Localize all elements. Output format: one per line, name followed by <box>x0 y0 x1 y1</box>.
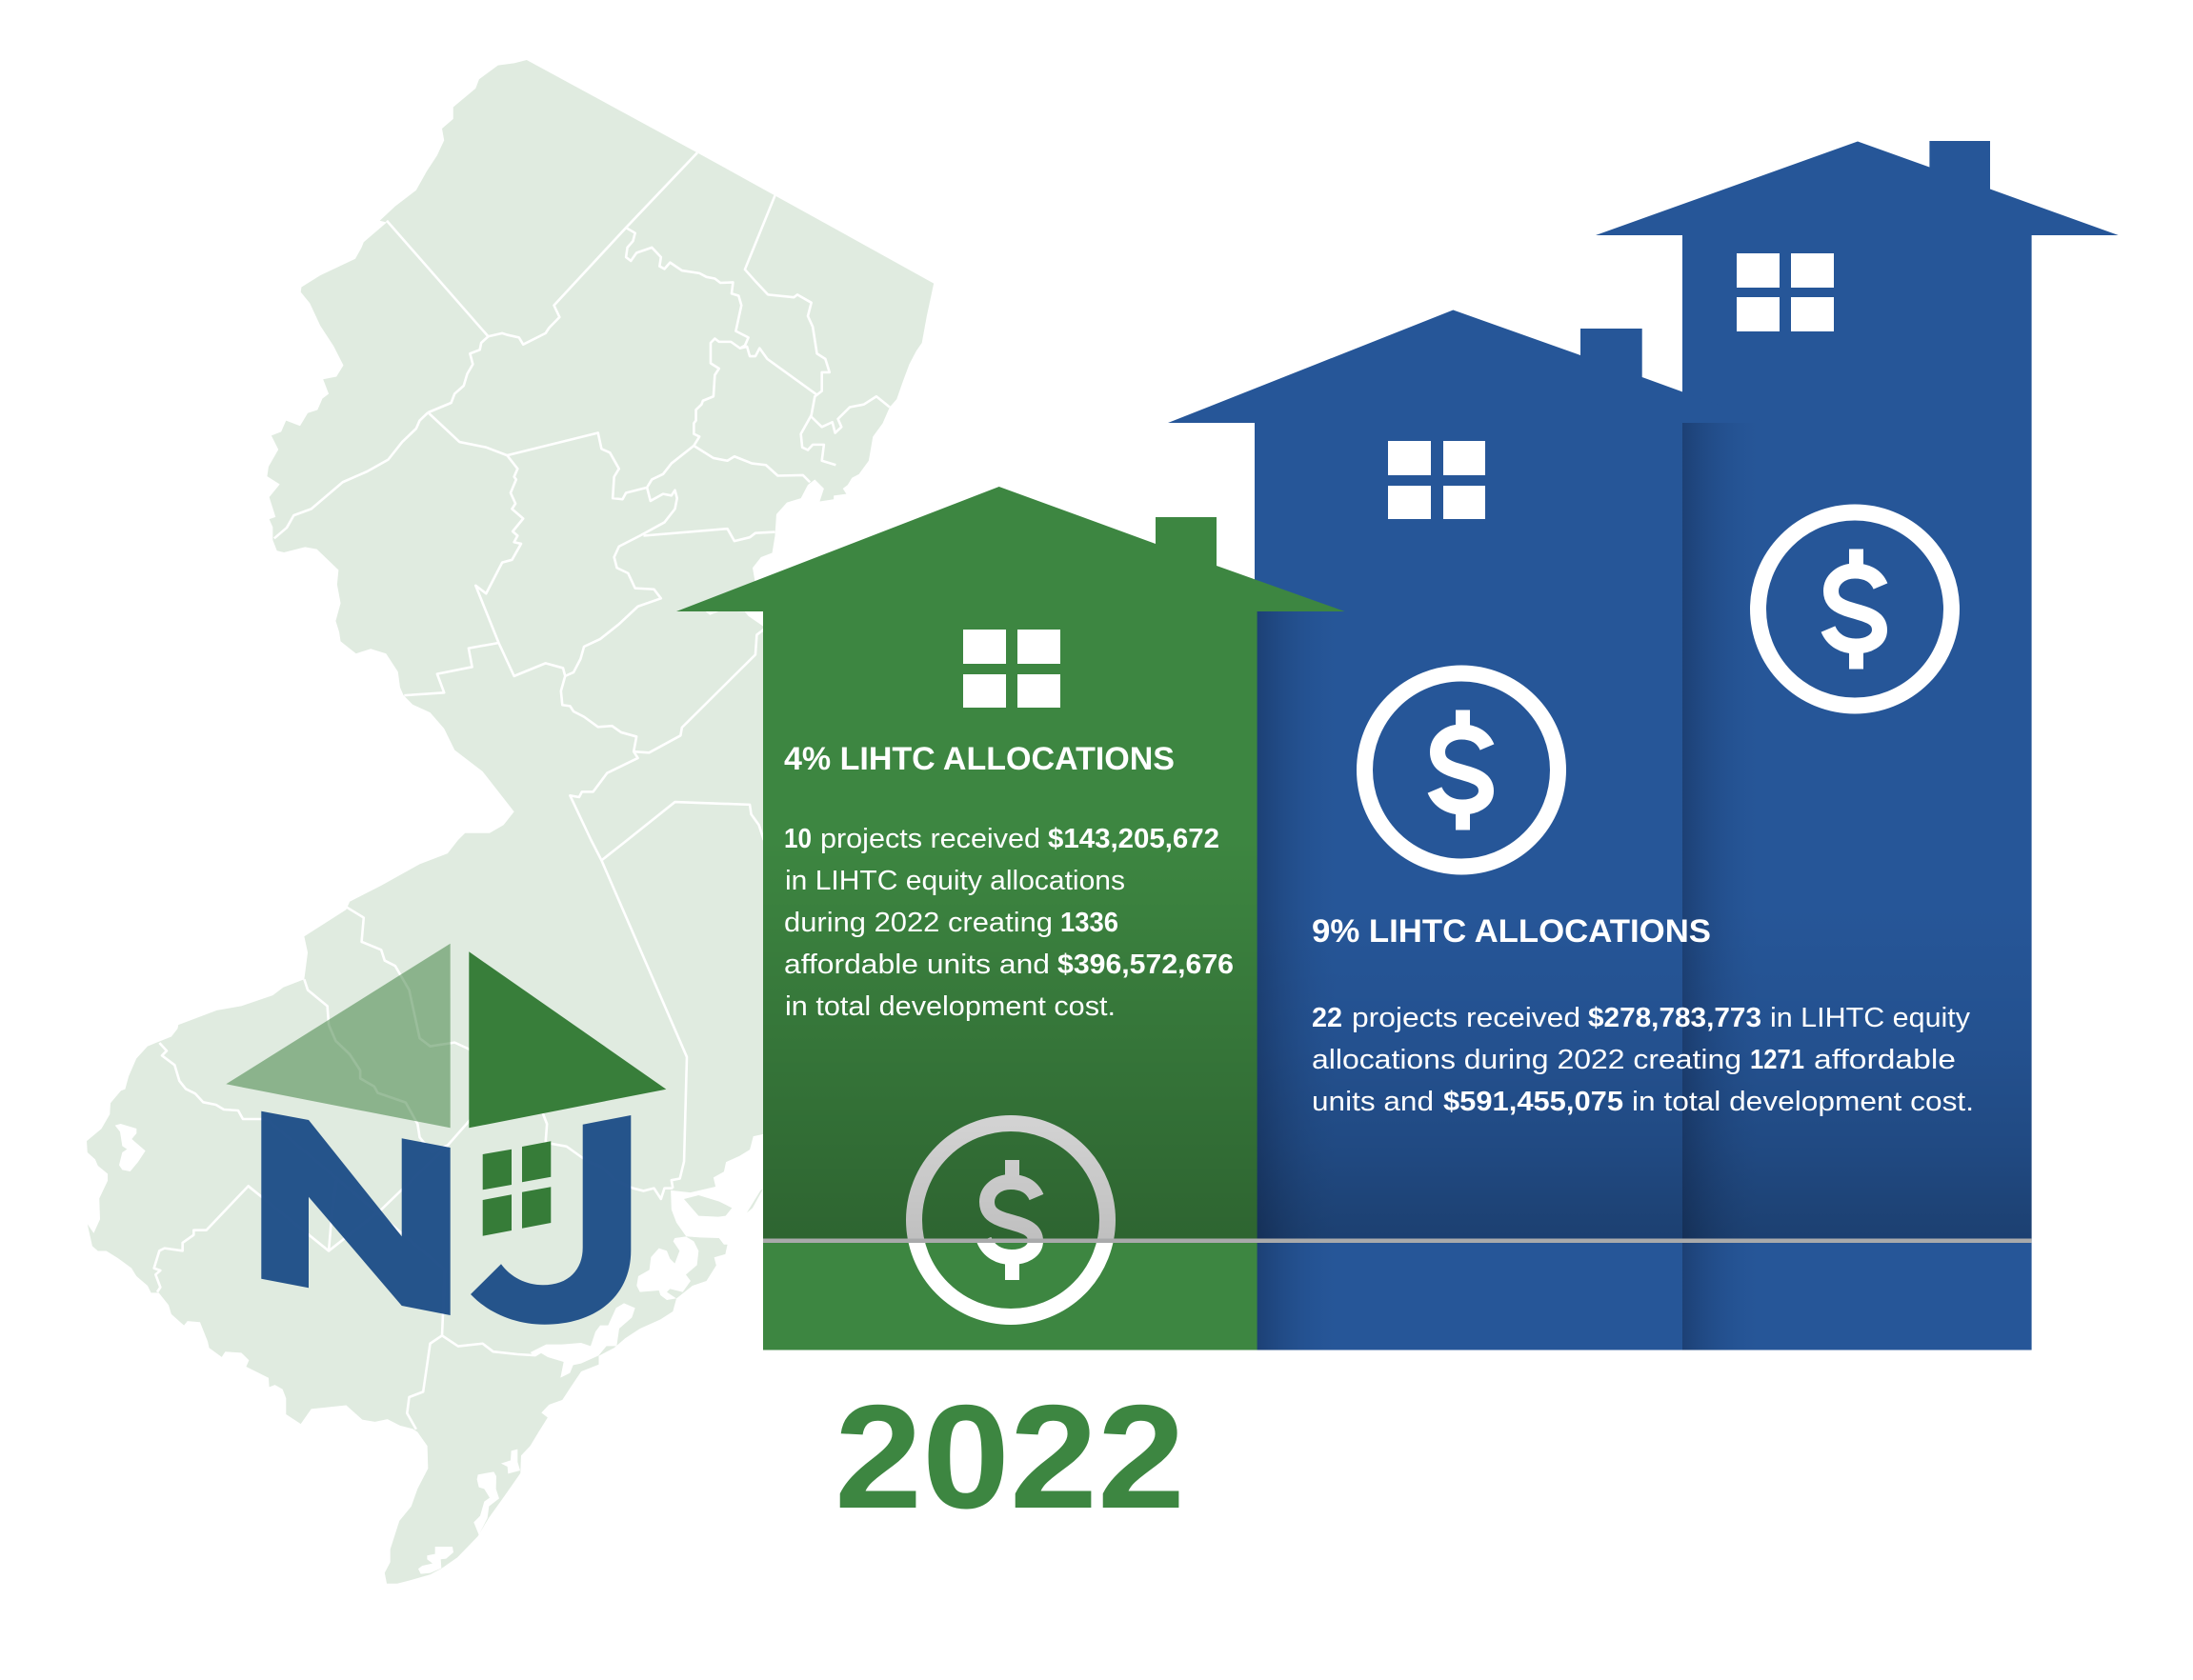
text block: 4% details: affordable units and <box>784 950 1050 980</box>
heading: 4% LIHTC allocations: 4% LIHTC ALLOCATIONS <box>784 741 1175 777</box>
dollar icon: green house <box>915 1124 1107 1316</box>
text block: 9% details: 1271 <box>1750 1045 1804 1075</box>
text block: 9% details: 22 <box>1312 1003 1342 1033</box>
fold shadow on middle house <box>1257 611 1344 1350</box>
text block: 4% details: 10 <box>784 824 812 854</box>
map outline <box>87 60 934 1584</box>
southern inlets <box>418 1450 520 1574</box>
text block: 4% details: $143,205,672 <box>1048 824 1219 854</box>
logo letter N <box>261 1111 451 1315</box>
window: middle house <box>1388 441 1485 519</box>
logo letter J <box>471 1115 631 1325</box>
year label: 2022 <box>835 1374 1185 1539</box>
middle blue house <box>1168 310 1768 1350</box>
text block: 9% details: projects received <box>1352 1003 1580 1033</box>
text block: 4% details: in total development cost. <box>785 991 1116 1022</box>
text block: 4% details <box>784 824 1234 1022</box>
tallest blue house <box>1596 141 2119 1350</box>
fold shadow on tallest house <box>1682 423 1766 1350</box>
text block: 4% details: projects received <box>820 824 1040 854</box>
logo left roof <box>226 944 451 1128</box>
dollar icon: middle house <box>1364 673 1559 867</box>
text block: 9% details: in total development cost. <box>1632 1087 1974 1117</box>
window: green house <box>963 630 1060 708</box>
heading: 9% LIHTC allocations: 9% LIHTC ALLOCATIONS <box>1312 913 1711 950</box>
text block: 4% details: in LIHTC equity allocations <box>785 866 1125 896</box>
text block: 4% details: $396,572,676 <box>1057 950 1234 980</box>
text block: 4% details: 1336 <box>1060 908 1118 938</box>
text block: 9% details: in LIHTC equity <box>1770 1003 1971 1033</box>
text block: 4% details: during 2022 creating <box>784 908 1053 938</box>
text block: 9% details: units and <box>1312 1087 1434 1117</box>
text block: 9% details: $591,455,075 <box>1443 1087 1623 1117</box>
logo right roof <box>469 951 666 1128</box>
logo: NJ house <box>226 944 666 1325</box>
dollar icon: tallest house <box>1759 512 1951 706</box>
shaded band on green house <box>763 838 1257 1241</box>
window: tallest house <box>1737 253 1834 331</box>
ground line <box>763 1238 2032 1243</box>
shaded band on blue houses <box>1257 905 2032 1241</box>
county borders: southwest <box>154 1043 267 1292</box>
text block: 9% details: $278,783,773 <box>1588 1003 1761 1033</box>
logo window <box>483 1141 551 1236</box>
county borders <box>248 152 890 1430</box>
map: New Jersey counties <box>87 60 934 1584</box>
text block: 9% details: allocations during 2022 creating <box>1312 1045 1741 1075</box>
text block: 9% details: affordable <box>1814 1045 1956 1075</box>
coastal lagoons <box>531 1189 763 1378</box>
Salem pond <box>115 1124 146 1171</box>
green house <box>676 487 1345 1350</box>
text block: 9% details <box>1312 1003 1974 1117</box>
